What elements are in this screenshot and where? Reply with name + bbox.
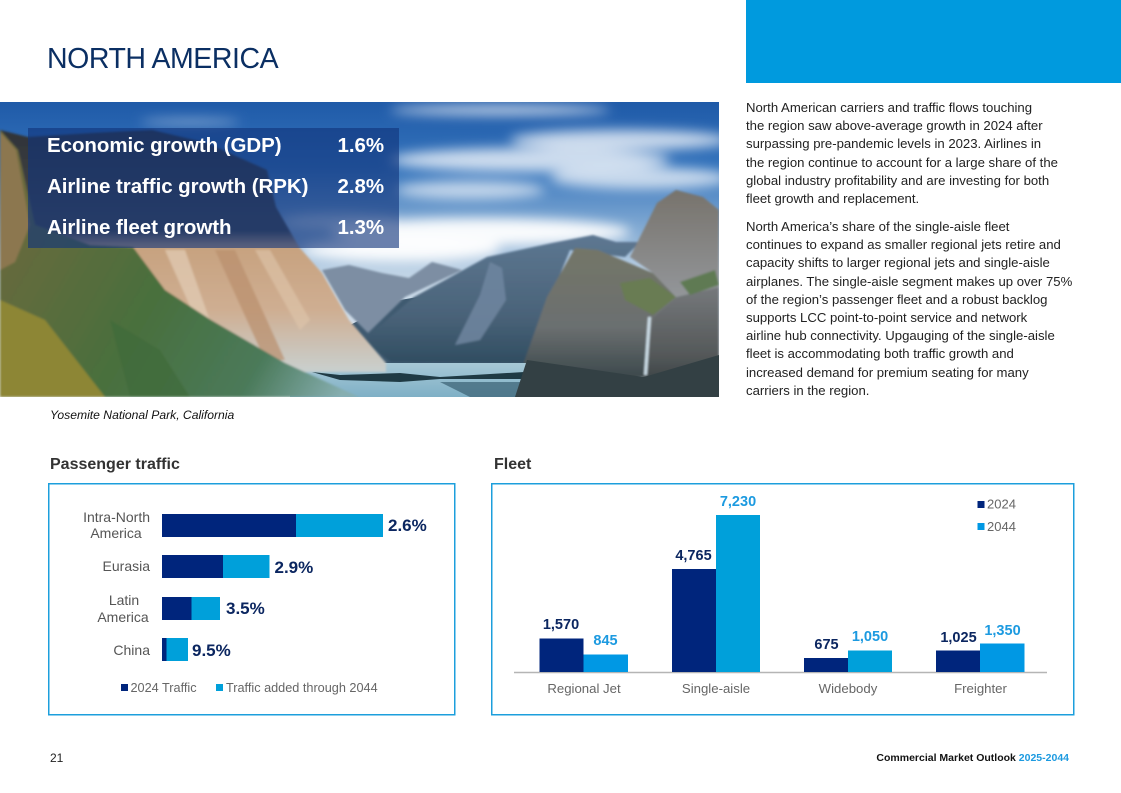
body paragraph 2 [746, 219, 1072, 398]
row: Intra-North America: America [90, 525, 142, 541]
legend [978, 496, 1016, 534]
stats overlay panel [28, 128, 399, 248]
row: Latin America [97, 592, 265, 625]
legend: Traffic added through 2044 [226, 681, 378, 695]
row: Latin America: America [97, 609, 149, 625]
group: Regional Jet [540, 617, 628, 696]
body paragraph 1: global industry profitability and are investing for both [746, 173, 1049, 188]
row: Intra-North America: Intra-North [83, 509, 150, 525]
stat: fleet [47, 216, 384, 239]
group: Freighter: 1,025 [940, 630, 977, 646]
photo caption: Yosemite National Park, California [50, 408, 234, 422]
body paragraph 2: North America’s share of the single-aisle fleet [746, 219, 1009, 234]
footer text: Commercial Market Outlook 2025-2044 [876, 752, 1069, 764]
row: Latin America: Latin [109, 592, 139, 608]
page number: 21 [50, 751, 63, 765]
photo: Yosemite valley [0, 102, 719, 397]
row: China [113, 638, 231, 661]
row: Eurasia [103, 555, 313, 578]
body paragraph 2: capacity shifts to larger regional jets and single-aisle [746, 255, 1050, 270]
body paragraph 2: of the region’s passenger fleet and a robust backlog [746, 292, 1047, 307]
legend: 2024 [987, 496, 1016, 512]
group: Widebody: 675 [814, 637, 839, 653]
row: China: China [113, 642, 150, 658]
row: Eurasia: 2.9% [274, 558, 313, 577]
row: Intra-North America: 2.6% [388, 516, 427, 535]
body paragraph 1 [746, 100, 1058, 206]
group: Single-aisle: 7,230 [720, 494, 756, 510]
legend [121, 681, 378, 695]
group: Single-aisle: 4,765 [675, 548, 712, 564]
chart: passenger traffic [48, 483, 456, 716]
group: Regional Jet: Regional Jet [547, 681, 621, 696]
body paragraph 1: the region continue to account for a large share of the [746, 155, 1058, 170]
body paragraph 2: airplanes. The single-aisle segment makes up over 75% [746, 274, 1072, 289]
group: Freighter: Freighter [954, 681, 1007, 696]
row: Latin America: 3.5% [226, 599, 265, 618]
legend: 2044 [987, 519, 1016, 534]
title: NORTH AMERICA [47, 43, 278, 75]
stat: RPK: Airline traffic growth (RPK) [47, 175, 308, 198]
stat: GDP [47, 134, 384, 157]
row: Intra-North America [83, 509, 427, 541]
row: China: 9.5% [192, 641, 231, 660]
legend: 2024 Traffic [130, 681, 197, 695]
stat: fleet: Airline fleet growth [47, 216, 231, 239]
group: Regional Jet: 845 [593, 633, 618, 649]
group: Single-aisle [672, 494, 760, 696]
group: Regional Jet: 1,570 [543, 617, 579, 633]
body paragraph 2: continues to expand as smaller regional jets retire and [746, 237, 1061, 252]
body paragraph 2: airline hub connectivity. Upgauging of the single-aisle [746, 328, 1055, 343]
body paragraph 1: North American carriers and traffic flows touching [746, 100, 1032, 115]
header accent block [746, 0, 1121, 83]
group: Freighter: 1,350 [984, 623, 1021, 639]
heading: passenger traffic: Passenger traffic [50, 456, 180, 473]
heading: fleet: Fleet [494, 456, 531, 473]
stat: GDP: 1.6% [338, 134, 384, 157]
body paragraph 2: carriers in the region. [746, 383, 869, 398]
stat: GDP: Economic growth (GDP) [47, 134, 282, 157]
body paragraph 1: the region saw above-average growth in 2024 after [746, 118, 1043, 133]
body paragraph 2: increased demand for premium seating for many [746, 365, 1029, 380]
row: Eurasia: Eurasia [103, 558, 150, 574]
group: Widebody [804, 629, 892, 696]
group: Freighter [936, 623, 1024, 696]
body paragraph 2: fleet is accommodating both traffic growth and [746, 346, 1014, 361]
stat: fleet: 1.3% [338, 216, 384, 239]
group: Single-aisle: Single-aisle [682, 681, 750, 696]
stat: RPK: 2.8% [338, 175, 384, 198]
body paragraph 1: surpassing pre-pandemic levels in 2023. Airlines in [746, 136, 1041, 151]
group: Widebody: Widebody [819, 681, 878, 696]
body paragraph 1: fleet growth and replacement. [746, 191, 919, 206]
chart: fleet [491, 483, 1074, 716]
body paragraph 2: supports LCC point-to-point service and network [746, 310, 1027, 325]
group: Widebody: 1,050 [852, 629, 888, 645]
